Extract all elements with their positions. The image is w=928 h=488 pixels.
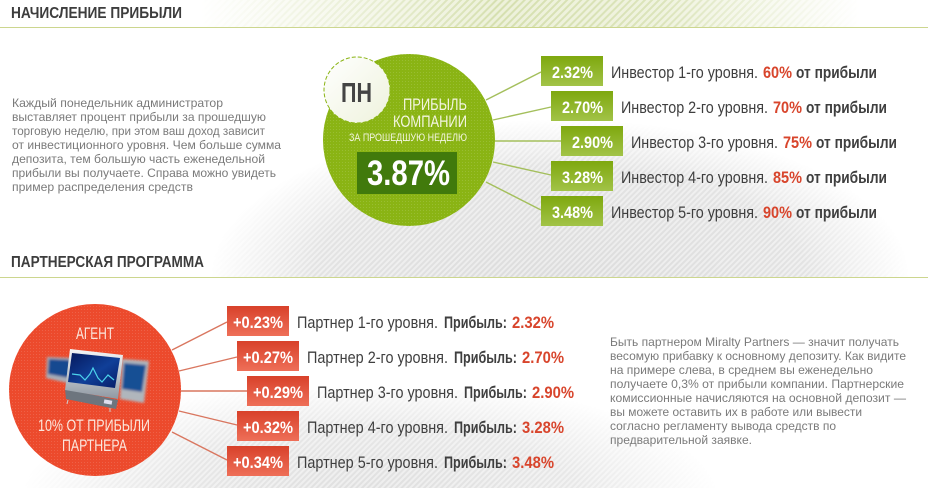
partner level 4: Партнер 4-го уровня. bbox=[307, 418, 448, 437]
partner level 1: Партнер 1-го уровня. bbox=[297, 313, 438, 332]
icon: computer monitors bbox=[46, 349, 149, 412]
partner level 1: +0.23% bbox=[233, 313, 283, 332]
circle caption bbox=[349, 95, 467, 144]
partner level 1: Прибыль: bbox=[444, 313, 507, 332]
text block: partner description bbox=[610, 335, 906, 447]
text block: partner description: Быть партнером Miralty Partners — значит получать bbox=[610, 335, 899, 349]
heading: profit accrual: НАЧИСЛЕНИЕ ПРИБЫЛИ bbox=[11, 5, 182, 22]
partner level 2: Партнер 2-го уровня. bbox=[307, 348, 448, 367]
investor level 3 bbox=[561, 126, 897, 156]
investor level 4: 3.28% bbox=[562, 168, 603, 187]
text block: partner description: вы можете оставить их в работе или вывести bbox=[610, 405, 862, 419]
investor level 2 bbox=[551, 91, 887, 121]
investor level 4: от прибыли bbox=[806, 168, 887, 187]
investor level 1: от прибыли bbox=[796, 63, 877, 82]
investor level 1: 60% bbox=[763, 63, 792, 82]
panel: company profit circle bbox=[323, 54, 495, 226]
investor level 1 bbox=[541, 56, 877, 86]
text block: accrual description: торговую неделю, при этом ваш доход зависит bbox=[12, 124, 265, 138]
text block: accrual description bbox=[12, 96, 281, 194]
partner level 2: Прибыль: bbox=[454, 348, 517, 367]
investor level 3: от прибыли bbox=[816, 133, 897, 152]
circle caption: КОМПАНИИ bbox=[393, 112, 467, 131]
text block: accrual description: пример распределения средств bbox=[12, 180, 193, 194]
circle caption: ЗА ПРОШЕДШУЮ НЕДЕЛЮ bbox=[349, 132, 467, 144]
partner level 4: Прибыль: bbox=[454, 418, 517, 437]
text block: accrual description: выставляет процент прибыли за прошедшую bbox=[12, 110, 266, 124]
text block: accrual description: Каждый понедельник администратор bbox=[12, 96, 223, 110]
text block: accrual description: депозита, тем большую часть еженедельной bbox=[12, 152, 265, 166]
investor level 1: Инвестор 1-го уровня. bbox=[611, 63, 758, 82]
badge: monday bbox=[324, 57, 390, 123]
text block: partner description: весомую прибавку к основному депозиту. Как видите bbox=[610, 349, 906, 363]
partner level 5 bbox=[227, 446, 554, 476]
partner level 2: 2.70% bbox=[522, 348, 564, 367]
text block: partner description: согласно регламенту вывода средств по bbox=[610, 419, 836, 433]
partner level 3 bbox=[247, 376, 574, 406]
investor level 5: 3.48% bbox=[552, 203, 593, 222]
heading: partner program: ПАРТНЕРСКАЯ ПРОГРАММА bbox=[11, 254, 204, 271]
text block: partner description: получаете 0,3% от прибыли компании. Партнерские bbox=[610, 377, 904, 391]
partner level 3: 2.90% bbox=[532, 383, 574, 402]
partner level 4: +0.32% bbox=[243, 418, 293, 437]
partner level 1: 2.32% bbox=[512, 313, 554, 332]
text block: partner description: комиссионные начисляются на основной депозит — bbox=[610, 391, 906, 405]
connector lines: green bbox=[486, 72, 561, 210]
investor level 2: от прибыли bbox=[806, 98, 887, 117]
partner level 3: +0.29% bbox=[253, 383, 303, 402]
text block: partner description: предварительной заявке. bbox=[610, 433, 752, 447]
investor level 3: Инвестор 3-го уровня. bbox=[631, 133, 778, 152]
investor level 3: 2.90% bbox=[572, 133, 613, 152]
investor level 1: 2.32% bbox=[552, 63, 593, 82]
investor level 5 bbox=[541, 196, 877, 226]
badge: monday: ПН bbox=[341, 77, 372, 108]
agent caption: АГЕНТ bbox=[76, 324, 114, 343]
partner level 5: Прибыль: bbox=[444, 453, 507, 472]
partner level 1 bbox=[227, 306, 554, 336]
commission caption bbox=[38, 416, 150, 455]
investor level 5: 90% bbox=[763, 203, 792, 222]
connector lines: red bbox=[172, 322, 247, 460]
text block: accrual description: от инвестиционного уровня. Чем больше сумма bbox=[12, 138, 281, 152]
circle caption: ПРИБЫЛЬ bbox=[403, 95, 467, 114]
investor level 2: Инвестор 2-го уровня. bbox=[621, 98, 768, 117]
partner level 3: Партнер 3-го уровня. bbox=[317, 383, 458, 402]
text block: partner description: на примере слева, в среднем вы еженедельно bbox=[610, 363, 873, 377]
partner level 5: Партнер 5-го уровня. bbox=[297, 453, 438, 472]
partner level 3: Прибыль: bbox=[464, 383, 527, 402]
partner level 4 bbox=[237, 411, 564, 441]
commission caption: ПАРТНЕРА bbox=[62, 436, 127, 455]
partner level 2 bbox=[237, 341, 564, 371]
investor level 4: Инвестор 4-го уровня. bbox=[621, 168, 768, 187]
investor level 3: 75% bbox=[783, 133, 812, 152]
value: 3.87%: 3.87% bbox=[367, 154, 450, 193]
commission caption: 10% ОТ ПРИБЫЛИ bbox=[38, 416, 150, 435]
partner level 5: 3.48% bbox=[512, 453, 554, 472]
partner level 5: +0.34% bbox=[233, 453, 283, 472]
investor level 4 bbox=[551, 161, 887, 191]
investor level 5: от прибыли bbox=[796, 203, 877, 222]
investor level 2: 2.70% bbox=[562, 98, 603, 117]
text block: accrual description: прибыли вы получаете. Справа можно увидеть bbox=[12, 166, 276, 180]
investor level 5: Инвестор 5-го уровня. bbox=[611, 203, 758, 222]
panel: agent circle bbox=[9, 304, 181, 476]
partner level 4: 3.28% bbox=[522, 418, 564, 437]
partner level 2: +0.27% bbox=[243, 348, 293, 367]
investor level 4: 85% bbox=[773, 168, 802, 187]
investor level 2: 70% bbox=[773, 98, 802, 117]
